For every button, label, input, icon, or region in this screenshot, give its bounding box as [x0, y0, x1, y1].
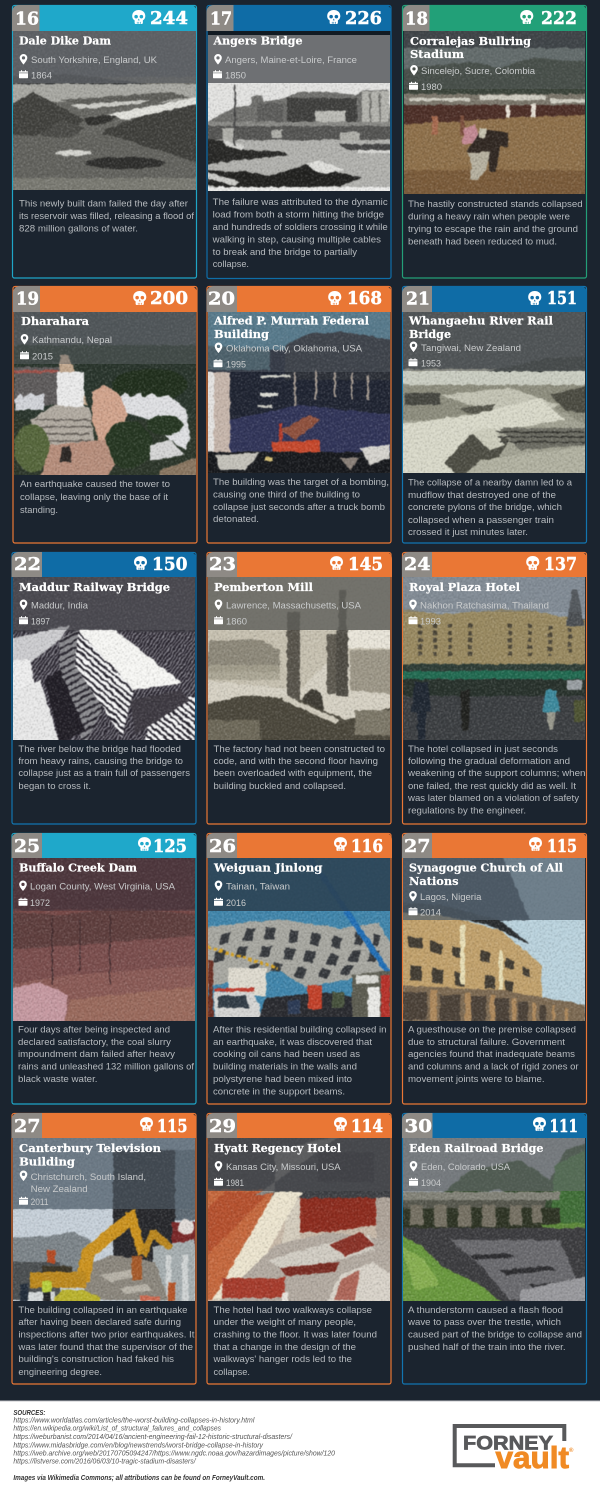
description 27b: engineering degree.	[18, 1367, 102, 1378]
header bar 23: 145	[348, 555, 383, 575]
description 21	[408, 478, 573, 538]
header bar 27b: 27	[14, 1117, 40, 1137]
description 26: concrete in the support beams.	[213, 1086, 345, 1098]
description 27: agencies found that inadequate beams	[408, 1049, 575, 1060]
year 22	[19, 616, 50, 628]
card 29: Hyatt Regency Hotel	[200, 1113, 400, 1384]
header bar 25: 125	[153, 837, 187, 857]
header bar 22: 150	[152, 555, 188, 575]
photo: bullring arena	[404, 31, 585, 194]
description 30	[407, 1305, 582, 1353]
header bar 25	[12, 833, 196, 858]
year 26	[214, 898, 246, 909]
description 23: building buckled and collapsed.	[214, 781, 346, 792]
description 18: during a heavy rain when people were	[408, 212, 570, 222]
description 26: building materials in the walls and	[213, 1062, 357, 1072]
year 27b: 2011	[31, 1197, 49, 1208]
description 18: The hastily constructed stands collapsed	[408, 199, 583, 210]
card 26: Weiguan Jinlong	[200, 833, 400, 1104]
title 30: Eden Railroad Bridge	[409, 1142, 543, 1155]
location 24: Nakhon Ratchasima, Thailand	[420, 600, 549, 612]
header bar 24: 137	[544, 555, 577, 575]
description 17: collapse.	[213, 259, 249, 270]
description 16: its reservoir was filled, releasing a flood of	[19, 211, 194, 222]
photo: mudflow at river bridge	[403, 312, 585, 473]
sources list: https://web.archive.org/web/20170705094247/https://www.ngdc.noaa.gov/hazardimages/picture/show/120	[13, 1451, 335, 1458]
description 21: mudflow that destroyed one of the	[408, 490, 556, 501]
logo: Forney Vault: ®	[569, 1447, 574, 1454]
title 26: Weiguan Jinlong	[213, 862, 323, 875]
title 20: Alfred P. Murrah Federal	[213, 314, 369, 328]
header bar 20	[206, 286, 392, 312]
location 27b: Christchurch, South Island,	[31, 1172, 146, 1183]
year 20	[214, 359, 246, 370]
sources list: https://www.worldatlas.com/articles/the-worst-building-collapses-in-history.html	[13, 1418, 255, 1425]
header bar 26: 116	[351, 837, 383, 857]
year 16: 1864	[31, 70, 53, 82]
card 27b: Canterbury Television Building	[5, 1113, 205, 1384]
description 20: collapse just seconds after a truck bomb	[213, 502, 385, 513]
header bar 19: 19	[16, 290, 39, 310]
description 17: walking in step, causing multiple cables	[212, 234, 381, 246]
card 24: Royal Plaza Hotel	[395, 552, 595, 824]
location 23: Lawrence, Massachusetts, USA	[226, 600, 362, 612]
description 19: standing.	[20, 505, 58, 516]
description 24	[407, 744, 586, 816]
year 24: 1993	[420, 616, 441, 628]
photo: toppled apartment block	[208, 858, 390, 1017]
description 21: collapsed when a passenger train	[408, 515, 554, 526]
header bar 29: 114	[351, 1117, 383, 1137]
location 19: Kathmandu, Nepal	[32, 335, 112, 346]
description 17: and hundreds of soldiers crossing it while	[213, 222, 388, 233]
title 22: Maddur Railway Bridge	[19, 581, 170, 594]
year 26: 2016	[226, 898, 246, 909]
description 26: cooking oil cans had been used as	[213, 1049, 360, 1060]
title 23: Pemberton Mill	[214, 581, 313, 594]
description 17	[212, 197, 388, 270]
header bar 27b: 115	[157, 1117, 188, 1137]
image credit: Images via Wikimedia Commons; all attributions can be found on ForneyVault.com.	[13, 1475, 265, 1482]
header bar 26: 26	[209, 837, 236, 857]
description 22: began to cross it.	[18, 781, 91, 792]
header bar 17	[206, 5, 392, 31]
year 20: 1995	[226, 360, 246, 370]
logo: Forney Vault: vault	[496, 1440, 569, 1475]
header bar 19	[13, 286, 197, 312]
location 29: Kansas City, Missouri, USA	[226, 1162, 341, 1173]
description 29: under the weight of many people,	[214, 1317, 356, 1328]
description 18	[408, 199, 583, 248]
year 25	[18, 898, 50, 909]
header bar 25: 25	[14, 837, 40, 857]
description 27: A guesthouse on the premise collapsed	[408, 1024, 576, 1036]
location 20: Oklahoma City, Oklahoma, USA	[226, 344, 363, 354]
card 23: Pemberton Mill	[200, 552, 400, 824]
header bar 27	[402, 833, 587, 858]
description 24: was later blamed on a violation of safety	[407, 793, 579, 804]
description 20	[213, 477, 389, 525]
header bar 16: 244	[150, 9, 188, 29]
title 18: Corralejas Bullring	[410, 35, 531, 48]
header bar 24: 24	[404, 555, 430, 575]
photo: coal slurry valley	[13, 858, 195, 1021]
year 25: 1972	[30, 898, 50, 909]
year 30: 1904	[421, 1178, 442, 1189]
description 19	[20, 479, 170, 516]
header bar 18: 18	[405, 10, 428, 30]
card 18: Corralejas Bullring Stadium	[395, 5, 595, 278]
card 20: Alfred P. Murrah Federal Building	[200, 286, 400, 543]
year 27: 2014	[420, 908, 442, 918]
description 29: that a change in the design of the	[214, 1342, 356, 1353]
description 25	[18, 1024, 194, 1085]
header bar 21: 21	[406, 290, 430, 310]
title 27: Synagogue Church of All	[409, 862, 563, 875]
header bar 17: 17	[210, 10, 232, 30]
description 18: trying to escape the rain and the ground	[408, 224, 578, 235]
sources list: SOURCES:	[13, 1410, 45, 1417]
year 17: 1850	[225, 70, 246, 82]
location 27b: New Zealand	[31, 1184, 88, 1195]
photo: hotel plaza	[403, 577, 585, 740]
description 27b: inspections after two prior earthquakes. It	[18, 1330, 195, 1340]
description 23: been overloaded with equipment, the	[214, 768, 372, 779]
description 26: After this residential building collapsed in	[213, 1024, 386, 1036]
footer panel	[0, 1400, 600, 1496]
description 20: causing one third of the building to	[213, 490, 360, 500]
description 26: polystyrene had been mixed into	[213, 1074, 352, 1085]
year 16	[19, 70, 53, 82]
location 21: Tangiwai, New Zealand	[421, 343, 521, 354]
title 27: Nations	[409, 875, 458, 888]
header bar 18: 222	[541, 9, 577, 29]
header bar 21: 151	[547, 289, 577, 309]
photo: hotel walkway debris	[208, 1138, 390, 1301]
title 24: Royal Plaza Hotel	[409, 581, 520, 594]
description 27: movement joints were to blame.	[408, 1074, 545, 1085]
description 16: 828 million gallons of water.	[19, 224, 138, 234]
photo: church guesthouse	[403, 858, 585, 1021]
card 17: Angers Bridge	[200, 5, 400, 278]
photo: river and trestle bridge	[403, 1138, 585, 1301]
sources list: https://weburbanist.com/2014/04/16/ancient-engineering-fail-12-historic-structural-disasters/	[13, 1434, 293, 1441]
description 23	[214, 744, 385, 792]
description 27	[408, 1024, 579, 1085]
logo: Forney Vault	[455, 1426, 574, 1475]
header bar 17: 226	[345, 9, 382, 29]
description 29: The hotel had two walkways collapse	[214, 1305, 372, 1316]
description 22: The river below the bridge had flooded	[18, 744, 181, 755]
location 17: Angers, Maine-et-Loire, France	[225, 55, 357, 66]
header bar 22: 22	[14, 555, 41, 575]
location 26: Tainan, Taiwan	[226, 882, 290, 892]
description 30: caused part of the bridge to collapse and	[408, 1330, 582, 1340]
sources list: https://listverse.com/2016/06/03/10-tragic-stadium-disasters/	[13, 1459, 197, 1466]
title 20	[213, 314, 369, 341]
description 19: collapse, leaving only the base of it	[20, 492, 168, 503]
location 16: South Yorkshire, England, UK	[31, 55, 158, 66]
header bar 20: 20	[208, 290, 235, 310]
header bar 16: 16	[15, 10, 39, 30]
description 27b	[17, 1305, 195, 1378]
description 17: load from both a storm hitting the bridge	[213, 210, 384, 220]
description 25: black waste water.	[18, 1074, 98, 1085]
year 19: 2015	[32, 352, 53, 362]
description 27: and columns and a lack of rigid zones or	[408, 1062, 579, 1072]
description 27b: The building collapsed in an earthquake	[18, 1305, 188, 1316]
title 21: Whangaehu River Rail	[408, 314, 553, 328]
title 21	[408, 314, 553, 341]
header bar 30: 111	[550, 1117, 578, 1137]
header bar 16	[12, 5, 197, 31]
header bar 29	[206, 1113, 392, 1138]
logo: Forney Vault: FORNEY	[463, 1434, 553, 1454]
description 23: The factory had not been constructed to	[214, 744, 385, 755]
description 24: weakening of the support columns; when	[407, 768, 586, 779]
description 26: an earthquake, it was discovered that	[213, 1037, 372, 1048]
year 27b	[19, 1197, 49, 1208]
location 22: Maddur, India	[31, 600, 89, 612]
description 27b: was later found that the supervisor of the	[17, 1342, 193, 1353]
year 19	[20, 351, 53, 362]
photo: harbour and bridge engraving	[208, 31, 390, 191]
year 22: 1897	[31, 616, 50, 628]
description 30: pushed half of the train into the river.	[408, 1342, 566, 1353]
description 23: code, and with the second floor having	[214, 756, 378, 767]
description 29: crashing to the floor. It was later found	[214, 1330, 377, 1340]
year 17	[213, 70, 246, 82]
card 25: Buffalo Creek Dam	[5, 833, 205, 1104]
header bar 30	[402, 1113, 587, 1138]
title 18: Stadium	[410, 48, 464, 61]
title 19: Dharahara	[21, 315, 89, 328]
title 20: Building	[214, 328, 269, 341]
year 29: 1981	[226, 1178, 244, 1189]
description 24: regulations by the engineer.	[408, 806, 526, 816]
card 27: Synagogue Church of All Nations	[395, 833, 595, 1104]
photo: collapsed tower base	[14, 312, 196, 475]
year 18	[409, 82, 442, 93]
sources list: https://www.midasbridge.com/en/blog/newstrends/worst-bridge-collapse-in-history	[13, 1442, 263, 1449]
description 20: detonated.	[213, 514, 259, 525]
card 30: Eden Railroad Bridge	[395, 1113, 595, 1384]
photo: bombed federal building	[208, 312, 390, 473]
description 22	[18, 744, 190, 792]
title 16: Dale Dike Dam	[19, 34, 111, 48]
description 21: concrete pylons of the bridge, which	[408, 502, 562, 513]
header bar 29: 29	[209, 1117, 236, 1137]
location 30: Eden, Colorado, USA	[421, 1162, 511, 1173]
header bar 19: 200	[150, 289, 188, 309]
description 29	[212, 1305, 377, 1378]
header bar 27: 27	[404, 837, 430, 857]
photo: dam breach landscape	[13, 31, 196, 190]
year 27	[408, 907, 442, 918]
year 21: 1953	[421, 358, 441, 370]
description 19: An earthquake caused the tower to	[20, 479, 170, 490]
header bar 30: 30	[404, 1117, 432, 1137]
description 25: Four days after being inspected and	[18, 1024, 170, 1036]
description 16	[19, 198, 194, 234]
description 24: following the gradual deformation and	[408, 756, 570, 767]
description 24: The hotel collapsed in just seconds	[408, 744, 558, 755]
year 23	[214, 616, 247, 628]
description 21: The collapse of a nearby damn led to a	[408, 478, 573, 488]
location 27: Lagos, Nigeria	[420, 892, 482, 903]
year 30	[409, 1178, 442, 1189]
description 17: The failure was attributed to the dynamic	[213, 197, 388, 208]
title 27b: Building	[19, 1155, 75, 1168]
description 30: wave to pass over the trestle, which	[407, 1317, 561, 1328]
title 25: Buffalo Creek Dam	[19, 862, 137, 875]
year 24	[408, 616, 441, 628]
location 27b	[20, 1170, 146, 1195]
header bar 21	[402, 286, 587, 312]
description 30: A thunderstorm caused a flash flood	[408, 1305, 563, 1316]
header bar 26	[206, 833, 392, 858]
year 21	[408, 358, 441, 370]
header bar 22	[12, 552, 196, 577]
header bar 23	[206, 552, 392, 577]
description 26	[213, 1024, 386, 1098]
description 27b: after having been declared safe during	[18, 1317, 181, 1328]
header bar 27b	[12, 1113, 196, 1138]
location 25: Logan County, West Virginia, USA	[30, 882, 176, 892]
description 16: This newly built dam failed the day after	[19, 198, 188, 210]
year 18: 1980	[421, 82, 442, 93]
title 18	[410, 35, 531, 61]
description 25: rains and unleashed 132 million gallons of	[18, 1062, 194, 1072]
title 21: Bridge	[409, 328, 451, 341]
photo: mill ruins engraving	[208, 577, 390, 740]
title 17: Angers Bridge	[212, 34, 302, 48]
description 18: beneath had been reduced to mud.	[408, 236, 557, 248]
header bar 20: 168	[347, 289, 382, 309]
location 18: Sincelejo, Sucre, Colombia	[421, 66, 536, 77]
sources list	[13, 1410, 335, 1466]
description 21: crossed it just minutes later.	[408, 527, 528, 538]
description 24: one failed, the rest quickly did as well. It	[408, 781, 576, 792]
description 17: to break and the bridge to partially	[213, 247, 357, 258]
year 29	[214, 1178, 244, 1189]
description 27: due to structural failure. Government	[408, 1037, 565, 1048]
photo: excavators on rubble	[13, 1138, 195, 1301]
description 22: collapse just as a train full of passengers	[18, 768, 190, 779]
card 16: Dale Dike Dam	[5, 5, 205, 278]
header bar 23: 23	[209, 555, 236, 575]
description 22: from heavy rains, causing the bridge to	[18, 756, 183, 767]
description 29: collapse.	[214, 1367, 250, 1378]
title 27	[409, 862, 563, 888]
description 25: declared satisfactory, the coal slurry	[18, 1037, 171, 1048]
title 27b	[19, 1142, 161, 1168]
description 29: walkways' hanger rods led to the	[212, 1354, 352, 1365]
photo: derailed train engraving	[13, 577, 195, 740]
card 19: Dharahara	[5, 286, 205, 543]
title 27b: Canterbury Television	[19, 1142, 161, 1155]
description 20: The building was the target of a bombing,	[213, 477, 389, 488]
header bar 24	[402, 552, 587, 577]
year 23: 1860	[226, 616, 247, 628]
card 21: Whangaehu River Rail Bridge	[395, 286, 595, 543]
header bar 18	[402, 5, 587, 31]
header bar 27: 115	[547, 837, 577, 857]
sources list: https://en.wikipedia.org/wiki/List_of_structural_failures_and_collapses	[13, 1426, 221, 1433]
description 27b: building's construction had faked his	[18, 1354, 174, 1365]
card 22: Maddur Railway Bridge	[5, 552, 205, 824]
description 25: impoundment dam failed after heavy	[18, 1049, 175, 1060]
title 29: Hyatt Regency Hotel	[214, 1142, 341, 1155]
